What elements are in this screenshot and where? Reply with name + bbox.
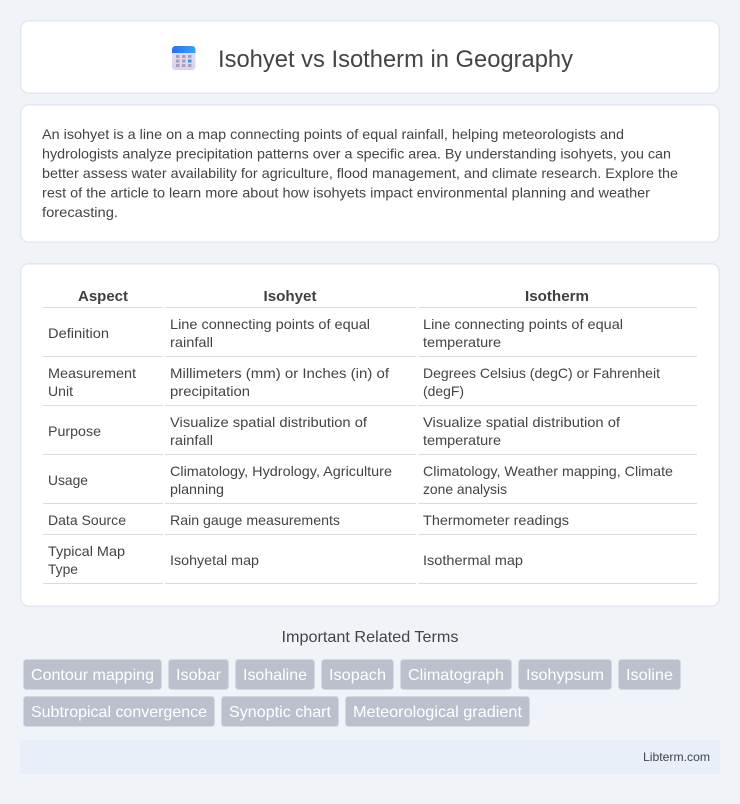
row: purpose: Purpose [48, 423, 101, 439]
row: usage: zone analysis [423, 481, 507, 497]
tag: meteorological gradient: Meteorological gradient [353, 704, 523, 721]
row: definition: temperature [423, 334, 501, 350]
tag: isopach [322, 660, 394, 690]
row: measurement unit [48, 365, 660, 399]
tag: meteorological gradient [346, 696, 530, 726]
row: purpose: Visualize spatial distribution of [423, 414, 620, 430]
table header: Isohyet [264, 288, 317, 305]
panel: introduction [21, 105, 719, 242]
tag: isobar: Isobar [176, 667, 222, 684]
row: measurement unit: (degF) [423, 383, 464, 399]
intro text: hydrologists analyze precipitation patterns over a specific area. By understanding isohyets, you can [42, 146, 671, 162]
row: measurement unit: Degrees Celsius (degC) or Fahrenheit [423, 365, 660, 381]
row: measurement unit: precipitation [170, 383, 250, 399]
row: definition: Definition [48, 325, 109, 341]
row: measurement unit: Unit [48, 383, 73, 399]
table header: Isotherm [525, 288, 589, 305]
header panel [21, 21, 719, 93]
intro text [42, 126, 678, 220]
row: typical map type: Isothermal map [423, 552, 523, 568]
row: purpose: temperature [423, 432, 501, 448]
footer bar [20, 740, 720, 774]
tag: subtropical convergence [24, 696, 214, 726]
intro text: rest of the article to learn more about how isohyets impact environmental planning and weather [42, 184, 650, 200]
icon: calendar [172, 46, 196, 70]
row: measurement unit: Measurement [48, 365, 136, 381]
title: Isohyet vs Isotherm in Geography [218, 46, 573, 73]
panel: comparison table [21, 264, 719, 606]
row: purpose: rainfall [170, 432, 213, 448]
tag: synoptic chart: Synoptic chart [229, 704, 332, 721]
row: definition: rainfall [170, 334, 213, 350]
tag: subtropical convergence: Subtropical convergence [31, 704, 207, 721]
intro text: forecasting. [42, 204, 118, 220]
table header [78, 288, 589, 305]
intro text: An isohyet is a line on a map connecting points of equal rainfall, helping meteorologists and [42, 126, 624, 142]
tag: isohypsum: Isohypsum [526, 667, 604, 684]
row: usage [48, 463, 673, 497]
tag: synoptic chart [222, 696, 338, 726]
tag: contour mapping: Contour mapping [31, 667, 154, 684]
row: typical map type [48, 543, 523, 577]
row: usage: planning [170, 481, 224, 497]
tag: isobar [168, 660, 228, 690]
tag: isoline: Isoline [626, 667, 673, 684]
row: usage: Climatology, Weather mapping, Climate [423, 463, 673, 479]
tag: isohaline [236, 660, 314, 690]
row: typical map type: Isohyetal map [170, 552, 259, 568]
row lines [43, 307, 697, 584]
row: data source: Data Source [48, 512, 126, 528]
tag: climatograph: Climatograph [408, 667, 504, 684]
tag: contour mapping [24, 660, 162, 690]
row: definition [48, 316, 623, 350]
intro text: better assess water availability for agriculture, flood management, and climate research. Explore the [42, 165, 678, 181]
row: data source [48, 512, 569, 528]
row: purpose [48, 414, 620, 448]
row: purpose: Visualize spatial distribution of [170, 414, 367, 430]
row: definition: Line connecting points of equal [170, 316, 370, 332]
row: data source: Thermometer readings [423, 512, 569, 528]
row: data source: Rain gauge measurements [170, 512, 340, 528]
row: typical map type: Type [48, 561, 78, 577]
row: usage: Usage [48, 472, 88, 488]
row: typical map type: Typical Map [48, 543, 125, 559]
tag: isohypsum [518, 660, 612, 690]
row: measurement unit: Millimeters (mm) or Inches (in) of [170, 365, 389, 381]
related terms heading: Important Related Terms [282, 629, 458, 646]
row: usage: Climatology, Hydrology, Agriculture [170, 463, 392, 479]
tag: climatograph [400, 660, 512, 690]
tag: isohaline: Isohaline [243, 667, 307, 684]
table header: Aspect [78, 288, 128, 305]
row: definition: Line connecting points of equal [423, 316, 623, 332]
footer credit: Libterm.com [643, 750, 710, 764]
tag: isopach: Isopach [329, 667, 386, 684]
tag: isoline [618, 660, 680, 690]
related terms tags [24, 660, 680, 726]
